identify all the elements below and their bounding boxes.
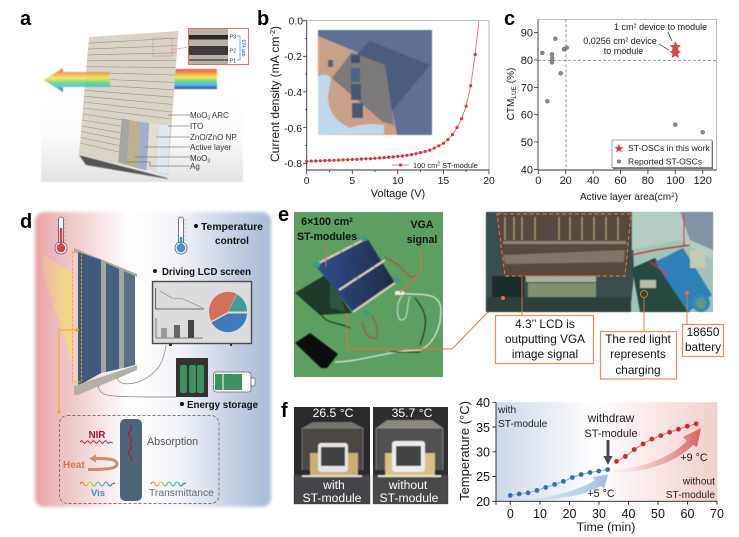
callout: battery: battery bbox=[685, 340, 721, 354]
NIR label: NIR bbox=[89, 430, 105, 441]
orange connector line bbox=[57, 328, 79, 414]
sunlight beam bbox=[42, 254, 73, 365]
label: VGA signal bbox=[407, 219, 437, 246]
callout: red light: charging bbox=[615, 363, 661, 377]
tick labels: 25 bbox=[476, 470, 490, 484]
energy storage text: Energy storage bbox=[187, 400, 258, 411]
inset micrograph bbox=[188, 28, 248, 64]
tick labels: 30 bbox=[592, 507, 606, 521]
tick labels: 5 bbox=[349, 176, 355, 187]
heat label: Heat bbox=[63, 460, 85, 471]
tick labels: 60 bbox=[614, 175, 627, 187]
callout: red light: The red light bbox=[605, 332, 672, 346]
tick labels: 70 bbox=[710, 507, 724, 521]
callout: battery: 18650 bbox=[687, 325, 720, 339]
cables bbox=[98, 345, 176, 397]
tick labels: 100 bbox=[666, 175, 684, 187]
panel b: J-V curve bbox=[257, 8, 495, 200]
red data series bbox=[616, 424, 696, 461]
panel label e: e bbox=[278, 204, 289, 226]
photo: modules on grass bbox=[294, 212, 443, 377]
temperature control text: control bbox=[215, 236, 249, 247]
legend: ST-module bbox=[440, 161, 478, 170]
axes bbox=[492, 402, 717, 505]
tick labels: -0.2 bbox=[284, 52, 302, 63]
absorbed waves bbox=[128, 425, 132, 462]
callout leader lines bbox=[501, 277, 689, 331]
tick labels: 40 bbox=[622, 507, 635, 521]
chart annotations: +5 °C bbox=[587, 488, 615, 500]
legend: Reported ST-OSCs bbox=[628, 156, 702, 166]
legend bbox=[612, 140, 713, 169]
tick labels: 35 bbox=[476, 421, 490, 435]
visible wave left bbox=[80, 482, 115, 486]
annotation arrows bbox=[659, 32, 672, 50]
inset: spectrum management bbox=[60, 416, 219, 504]
icon: hot thermometer bbox=[55, 217, 67, 254]
tick labels: 0 bbox=[507, 507, 514, 521]
floor shadow bbox=[41, 92, 243, 182]
annotation: 1 cm2 device: device to module bbox=[637, 22, 707, 32]
callout: red light: represents bbox=[610, 347, 666, 361]
blue data series bbox=[510, 470, 608, 495]
module plate bbox=[79, 31, 178, 179]
dashed LCD outline bbox=[497, 214, 631, 276]
tick labels: -0.8 bbox=[284, 159, 302, 170]
label: modules: ST-modules bbox=[297, 231, 357, 243]
panel label f: f bbox=[281, 400, 288, 422]
tick labels: 20 bbox=[563, 507, 576, 521]
legend bbox=[392, 161, 478, 170]
chart annotations: with bbox=[497, 405, 516, 416]
chart annotations bbox=[497, 405, 715, 501]
tick labels: 120 bbox=[694, 175, 712, 187]
transmittance label: Transmittance bbox=[149, 488, 214, 499]
trend arrow blue bbox=[510, 474, 608, 501]
y axis title: LUE bbox=[511, 85, 518, 99]
panel f: temperature test bbox=[281, 396, 724, 534]
photo: without ST-module: without bbox=[388, 478, 428, 492]
callout: battery bbox=[682, 324, 724, 356]
tick labels: 40 bbox=[521, 164, 533, 176]
layer labels: ITO bbox=[190, 122, 203, 131]
photo: without ST-module bbox=[373, 406, 448, 505]
LCD screen with charts bbox=[152, 282, 252, 346]
layer labels: MoO bbox=[190, 111, 207, 120]
tick labels: 30 bbox=[476, 446, 490, 460]
label: VGA signal: VGA bbox=[411, 219, 434, 231]
layer labels: 3 bbox=[207, 116, 210, 122]
right rainbow beam bbox=[174, 69, 217, 89]
panel e: demonstration photos bbox=[278, 204, 724, 379]
annotation: 0.0256 cm2 device: 0.0256 cm bbox=[583, 36, 625, 46]
tick labels: 50 bbox=[651, 507, 665, 521]
chart annotations: ST-module bbox=[584, 428, 638, 440]
label: VGA signal: signal bbox=[407, 234, 437, 246]
annotation: 0.0256 cm2 device: 2 bbox=[625, 38, 628, 44]
photo: with ST-module: with bbox=[322, 478, 345, 492]
label: modules bbox=[297, 216, 357, 243]
tick labels: 80 bbox=[642, 175, 654, 187]
chart annotations: ST-module bbox=[498, 419, 548, 430]
tick labels: 15 bbox=[438, 176, 449, 187]
panel label b: b bbox=[257, 8, 269, 30]
layer leader lines bbox=[126, 115, 190, 166]
legend: ST-OSCs in this work bbox=[628, 143, 710, 153]
dashed detail box on module bbox=[72, 252, 82, 382]
icon: cold thermometer bbox=[175, 217, 187, 254]
photo: with ST-module bbox=[294, 406, 370, 505]
tick labels: 20 bbox=[560, 175, 572, 187]
red J-V curve bbox=[307, 21, 479, 161]
tick labels: 0 bbox=[304, 176, 310, 187]
window solar modules bbox=[74, 248, 137, 395]
annotation: 0.0256 cm2 device: device bbox=[628, 36, 657, 46]
stars: this work bbox=[670, 41, 681, 58]
label: modules: 2 bbox=[349, 217, 353, 224]
Vis label: Vis bbox=[91, 488, 105, 499]
label: modules: 6×100 cm bbox=[301, 216, 349, 228]
x axis title: ) bbox=[675, 192, 678, 203]
NIR wave bbox=[80, 441, 113, 443]
layer labels: ZnO/ZnO NP bbox=[190, 133, 237, 142]
photo: without ST-module: 35.7 °C bbox=[392, 406, 433, 420]
tick labels: 80 bbox=[521, 55, 533, 67]
dashed box bbox=[60, 416, 219, 504]
y axis title: ) bbox=[268, 26, 282, 30]
tick labels: 10 bbox=[533, 507, 547, 521]
panel a: device schematic bbox=[20, 8, 248, 182]
heat arrow bbox=[88, 454, 117, 470]
photo: LCD close-up bbox=[486, 212, 713, 312]
layer labels: MoO bbox=[190, 154, 207, 163]
photo: module in front of building bbox=[318, 30, 432, 135]
layer labels bbox=[190, 111, 237, 171]
tick labels: 10 bbox=[392, 176, 404, 187]
y axis title: -2 bbox=[268, 30, 277, 37]
tick labels: -0.4 bbox=[284, 88, 302, 99]
x axis title: Active layer area(cm bbox=[580, 192, 671, 203]
orange leader lines bbox=[326, 243, 503, 349]
annotation: 0.0256 cm2 device: to module bbox=[604, 46, 643, 56]
x axis title: Voltage (V) bbox=[371, 188, 425, 200]
y axis title: CTM bbox=[506, 99, 517, 120]
chart annotations: +9 °C bbox=[680, 452, 708, 464]
photo: with ST-module: 26.5 °C bbox=[313, 406, 354, 420]
module cross section bbox=[120, 419, 142, 501]
chart annotations: without bbox=[682, 476, 715, 488]
layer labels: Ag bbox=[190, 162, 200, 171]
absorption label: Absorption bbox=[147, 436, 198, 448]
inset micrograph: P1 bbox=[230, 58, 236, 64]
tick labels: 50 bbox=[521, 137, 533, 149]
y axis title: (%) bbox=[506, 68, 517, 86]
tick labels: 60 bbox=[681, 507, 694, 521]
tick labels: 40 bbox=[587, 175, 599, 187]
tick labels bbox=[284, 16, 495, 187]
y axis title: Temperature (°C) bbox=[457, 401, 472, 501]
tick labels: 70 bbox=[521, 82, 533, 94]
scribe detail marker bbox=[153, 38, 188, 56]
callout: LCD: outputting VGA bbox=[505, 332, 585, 346]
chart annotations: withdraw bbox=[587, 411, 635, 425]
annotation: 1 cm2 device: 2 bbox=[634, 24, 637, 30]
tick labels: 20 bbox=[483, 176, 495, 187]
scatter: reported ST-OSCs bbox=[540, 37, 705, 134]
callout: LCD: image signal bbox=[512, 347, 578, 361]
tick labels: 60 bbox=[521, 110, 533, 122]
device layer stack bbox=[118, 118, 170, 174]
icon: battery level bbox=[214, 372, 255, 392]
driving LCD screen text: Driving LCD screen bbox=[162, 267, 251, 278]
withdraw arrow bbox=[604, 440, 612, 465]
red to blue background bbox=[35, 212, 271, 507]
x axis title: Time (min) bbox=[577, 520, 635, 534]
x axis title: 2 bbox=[671, 192, 675, 199]
temperature control text: Temperature bbox=[201, 222, 263, 233]
layer labels: ARC bbox=[210, 111, 229, 120]
visible wave right bbox=[151, 482, 186, 486]
battery pack bbox=[176, 358, 208, 397]
annotation: 1 cm2 device: 1 cm bbox=[614, 22, 634, 32]
trend arrow red bbox=[613, 428, 701, 473]
legend: 2 bbox=[437, 162, 440, 168]
tick labels: 20 bbox=[476, 495, 490, 509]
legend: 100 cm bbox=[413, 161, 437, 170]
inset micrograph: P2 bbox=[230, 48, 236, 54]
photo: without ST-module: ST-module bbox=[380, 491, 439, 505]
layer labels: 3 bbox=[207, 158, 210, 164]
inset micrograph: P3 bbox=[230, 34, 236, 40]
panel c: CTM scatter bbox=[504, 8, 717, 203]
layer labels: Active layer bbox=[190, 143, 232, 152]
panel label c: c bbox=[504, 8, 515, 30]
axes bbox=[534, 19, 717, 174]
tick labels bbox=[521, 28, 712, 187]
chart background bbox=[496, 402, 717, 501]
panel d: application schematic bbox=[20, 211, 271, 507]
photo: with ST-module: ST-module bbox=[303, 491, 362, 505]
tick labels: 0.0 bbox=[289, 16, 303, 28]
tick labels: 0 bbox=[535, 175, 541, 187]
tick labels: -0.6 bbox=[284, 124, 302, 135]
y axis title: Current density (mA cm bbox=[268, 37, 282, 162]
callout: LCD: 4.3’’ LCD is bbox=[515, 317, 575, 331]
callout: red light bbox=[600, 332, 676, 379]
inset micrograph: 174 μm bbox=[240, 39, 246, 57]
axes bbox=[303, 21, 489, 174]
tick labels: 40 bbox=[476, 396, 490, 410]
temperature control text bbox=[194, 222, 263, 247]
tick labels bbox=[476, 396, 724, 521]
left rainbow arrow bbox=[44, 68, 110, 92]
tick labels: 90 bbox=[521, 28, 533, 40]
panel label d: d bbox=[20, 211, 32, 233]
chart annotations: ST-module bbox=[666, 490, 715, 501]
panel label a: a bbox=[20, 8, 32, 30]
annotation: 0.0256 cm2 device bbox=[583, 36, 657, 56]
callout: LCD bbox=[496, 316, 594, 364]
